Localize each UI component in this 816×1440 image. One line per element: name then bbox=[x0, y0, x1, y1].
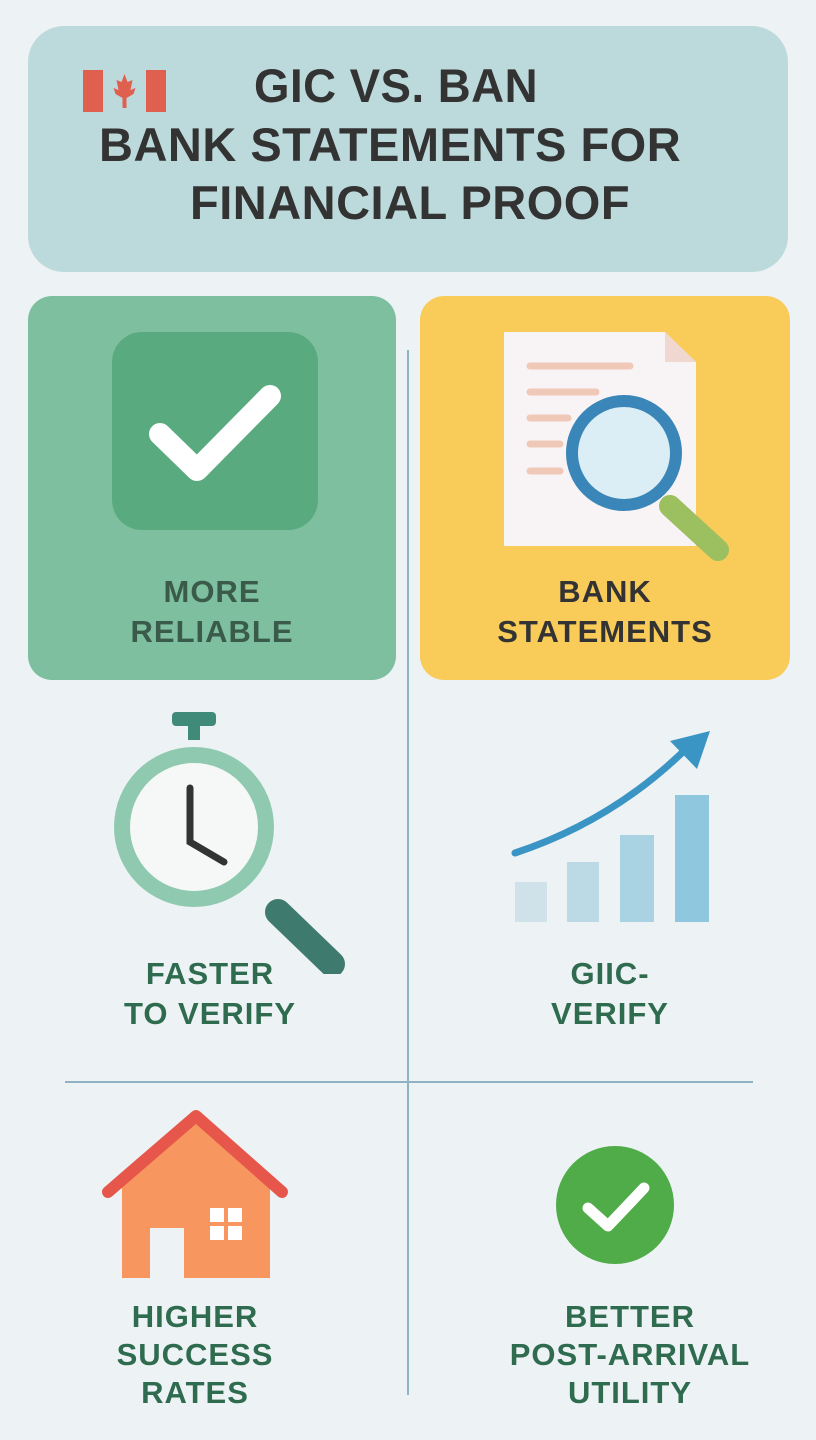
label: faster to verify bbox=[124, 956, 296, 1031]
label: higher success rates bbox=[117, 1299, 273, 1410]
icon: stopwatch magnifier bbox=[114, 712, 345, 974]
label: giic verify bbox=[551, 956, 669, 1031]
icon: house bbox=[102, 1110, 288, 1278]
panel: more reliable bbox=[28, 296, 396, 680]
icon: canadian flag bbox=[83, 70, 166, 112]
label: RELIABLE bbox=[130, 614, 294, 649]
label: faster to verify: TO VERIFY bbox=[124, 996, 296, 1031]
label: BANK bbox=[558, 574, 652, 609]
label: better post-arrival utility bbox=[510, 1299, 750, 1410]
icon: bar chart with arrow bbox=[512, 731, 710, 922]
title panel bbox=[28, 26, 788, 272]
label bbox=[497, 574, 713, 649]
label: better post-arrival utility: UTILITY bbox=[568, 1375, 692, 1410]
label: faster to verify: FASTER bbox=[146, 956, 274, 991]
panel: bank statements bbox=[420, 296, 790, 680]
label: MORE bbox=[164, 574, 260, 609]
divider lines bbox=[407, 350, 409, 1395]
label: better post-arrival utility: BETTER bbox=[565, 1299, 695, 1334]
title text: FINANCIAL PROOF bbox=[190, 176, 630, 229]
label: better post-arrival utility: POST-ARRIVAL bbox=[510, 1337, 750, 1372]
icon: check square bbox=[112, 332, 318, 530]
title text bbox=[99, 59, 681, 229]
label: higher success rates: HIGHER bbox=[132, 1299, 258, 1334]
label: higher success rates: RATES bbox=[141, 1375, 249, 1410]
title text: BANK STATEMENTS FOR bbox=[99, 118, 681, 171]
label: giic verify: GIIC- bbox=[570, 956, 650, 991]
title text: GIC VS. BAN bbox=[254, 59, 538, 112]
label: giic verify: VERIFY bbox=[551, 996, 669, 1031]
label: higher success rates: SUCCESS bbox=[117, 1337, 273, 1372]
icon: green check circle bbox=[556, 1146, 674, 1264]
label bbox=[130, 574, 294, 649]
icon: document with magnifier bbox=[504, 332, 729, 561]
label: STATEMENTS bbox=[497, 614, 713, 649]
